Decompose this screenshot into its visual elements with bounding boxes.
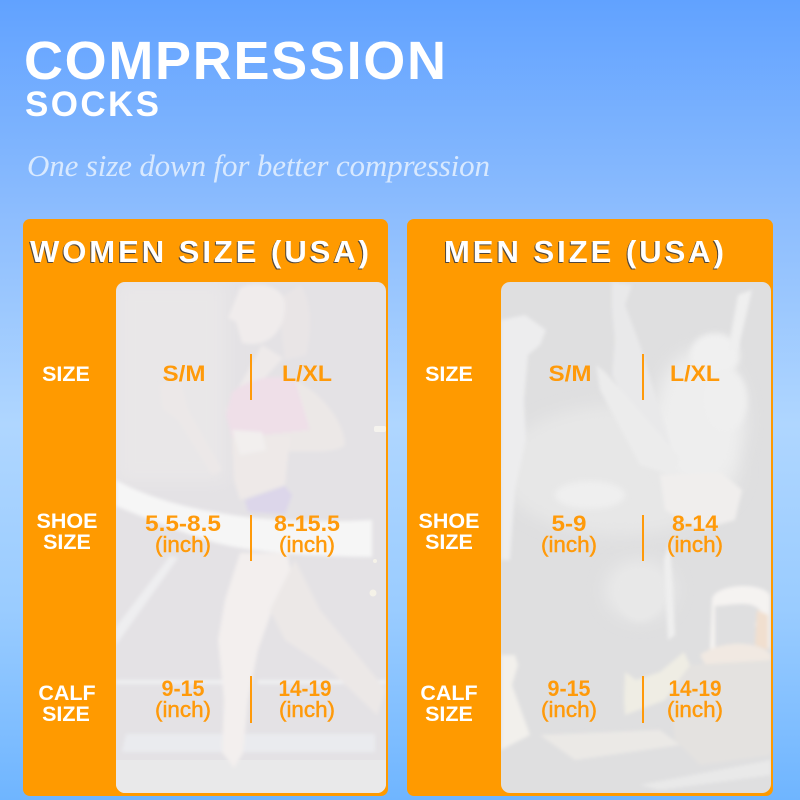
row label: calf size: SIZE — [42, 702, 90, 726]
row: size values: L/XL — [670, 361, 720, 386]
row label: shoe size — [37, 509, 97, 554]
panel: men size — [407, 219, 773, 796]
photo: athlete with chalk dust and kettlebell — [500, 282, 771, 793]
panel background women — [23, 219, 388, 796]
title: SOCKS — [25, 85, 159, 124]
heading: women size: WOMEN SIZE (USA) — [30, 234, 369, 269]
row label: calf size — [420, 681, 478, 726]
title — [24, 31, 446, 124]
row: calf size values — [541, 676, 723, 723]
panel background men — [407, 219, 773, 796]
row label: shoe size: SHOE — [37, 509, 97, 533]
photo: woman running on treadmill — [116, 282, 386, 793]
row: shoe size values: (inch) — [541, 532, 597, 557]
row: calf size values: 9-15 — [548, 676, 590, 701]
row: calf size values — [155, 676, 335, 723]
row label: size: SIZE — [42, 362, 90, 386]
row: calf size values: (inch) — [155, 697, 211, 722]
row: shoe size values: (inch) — [279, 532, 335, 557]
row label: shoe size: SIZE — [425, 530, 473, 554]
row: size values — [548, 354, 720, 400]
row: shoe size values: 5.5-8.5 — [145, 511, 221, 536]
row: calf size values: 14-19 — [668, 676, 722, 701]
title: COMPRESSION — [24, 31, 446, 91]
row label: shoe size: SHOE — [419, 509, 479, 533]
row: shoe size values — [145, 511, 340, 561]
row: shoe size values — [541, 511, 723, 561]
row: calf size values: 9-15 — [162, 676, 204, 701]
row label: calf size — [38, 681, 96, 726]
panel: women size — [23, 219, 388, 796]
row label: size: SIZE — [425, 362, 473, 386]
row: shoe size values: (inch) — [667, 532, 723, 557]
row: size values — [162, 354, 332, 400]
row label: calf size: CALF — [420, 681, 478, 705]
row: calf size values: 14-19 — [278, 676, 332, 701]
row: calf size values: (inch) — [667, 697, 723, 722]
heading: men size: MEN SIZE (USA) — [444, 234, 724, 269]
row: shoe size values: 8-15.5 — [274, 511, 340, 536]
row: shoe size values: (inch) — [155, 532, 211, 557]
tagline: One size down for better compression — [27, 148, 490, 183]
row: size values: S/M — [548, 361, 592, 386]
row: calf size values: (inch) — [541, 697, 597, 722]
row label: shoe size: SIZE — [43, 530, 91, 554]
row: size values: S/M — [162, 361, 206, 386]
row label: calf size: CALF — [38, 681, 96, 705]
row: size values: L/XL — [282, 361, 332, 386]
row label: shoe size — [419, 509, 479, 554]
row label: calf size: SIZE — [425, 702, 473, 726]
row: shoe size values: 8-14 — [672, 511, 718, 536]
row: calf size values: (inch) — [279, 697, 335, 722]
row: shoe size values: 5-9 — [552, 511, 586, 536]
